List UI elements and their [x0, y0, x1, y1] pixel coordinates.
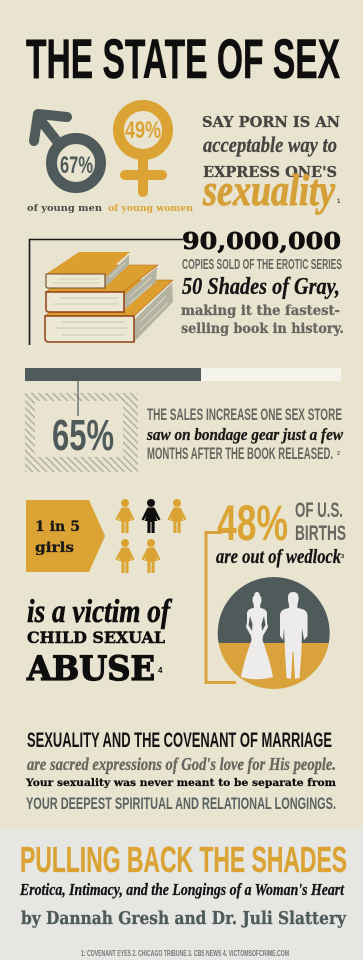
- panel: porn statistics: [27, 106, 341, 215]
- text: is a victim of: is a victim of: [27, 594, 172, 630]
- bride: [241, 592, 273, 679]
- icon: couple in circle: [218, 577, 330, 689]
- panel: book sales: [30, 228, 344, 345]
- text: saw on bondage gear: saw on bondage gear just a few: [146, 425, 344, 444]
- panel: births out of wedlock: [206, 495, 346, 689]
- connector line: [77, 381, 79, 416]
- icon: stack of books: [45, 252, 173, 342]
- icon: male symbol 67%: [34, 114, 100, 188]
- text: your sexuality: Your sexuality was never meant to be separate from: [25, 777, 336, 789]
- panel: child abuse statistic: [26, 499, 186, 689]
- arrow tag: 1 in 5 girls: girls: [35, 540, 74, 556]
- bracket line: [206, 532, 236, 682]
- number: 48%: 48%: [217, 495, 288, 551]
- footnote marker 3: 3: [341, 554, 344, 560]
- text: sexuality: sexuality: [202, 166, 335, 215]
- label: of young men: of young men: [27, 203, 102, 214]
- arrow tag: 1 in 5 girls: [26, 500, 105, 572]
- number: 90,000,000: 90,000,000: [182, 228, 341, 255]
- footnote marker 1: 1: [337, 199, 341, 205]
- bracket line: [30, 240, 183, 345]
- hatched box: [25, 393, 138, 472]
- icon: male symbol 67%: 67%: [60, 152, 93, 179]
- icon: five girls pictogram: [116, 499, 186, 573]
- text: making it the fastest: making it the fastest-: [181, 303, 340, 319]
- footnote marker 4: 4: [158, 666, 163, 675]
- groom: [280, 592, 308, 679]
- text: child sexual: CHILD SEXUAL: [27, 628, 165, 647]
- progress bar: [25, 368, 341, 381]
- icon: female symbol 49%: 49%: [125, 117, 161, 144]
- panel: book footer: [0, 829, 363, 960]
- text: selling book in history: selling book in history.: [181, 321, 344, 337]
- footnote marker 2: 2: [337, 451, 340, 457]
- number: 65%: 65%: [52, 411, 114, 460]
- icon: female symbol 49%: [118, 106, 168, 192]
- label: of young women: of young women: [108, 203, 193, 214]
- panel: covenant of marriage: [25, 729, 336, 813]
- panel: bondage gear sales: [25, 368, 344, 472]
- text: express one's: EXPRESS ONE'S: [203, 164, 337, 181]
- arrow tag: 1 in 5 girls: 1 in 5: [35, 519, 80, 535]
- text: acceptable way to: acceptable way to: [203, 132, 337, 157]
- text: say porn is an: SAY PORN IS AN: [202, 114, 340, 131]
- text: abuse: ABUSE: [26, 649, 155, 689]
